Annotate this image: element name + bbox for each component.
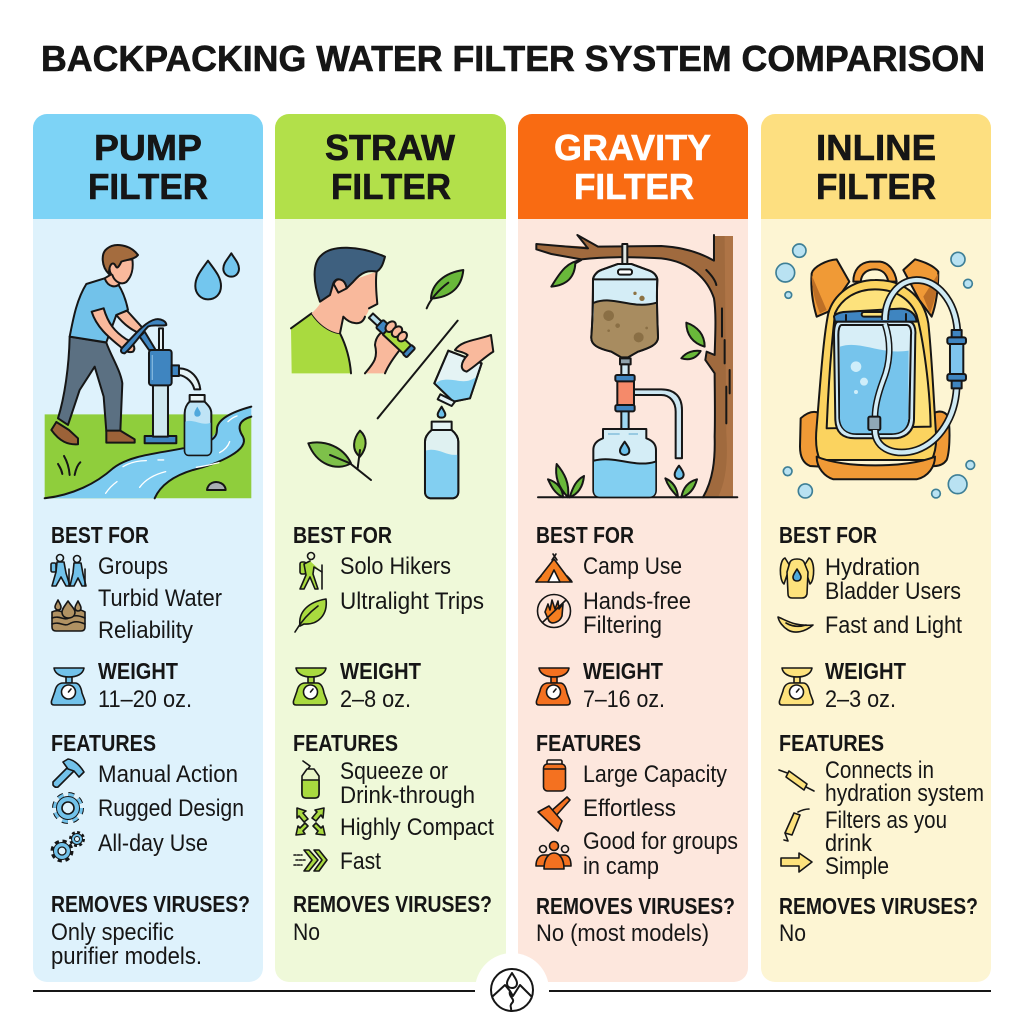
icon: tent [536,554,572,582]
icon: hammer [53,759,84,787]
text: Hands-free Filtering: Filtering [583,612,662,639]
icon: mountain and water drop logo [491,969,533,1011]
panel header [33,114,263,219]
text: Groups: Groups [98,553,168,580]
icon: water jug [544,760,566,791]
panel header: INLINE [816,127,936,168]
text: Turbid Water: Turbid Water [98,585,222,612]
removes viruses: No [293,919,320,946]
icon: arrow [781,853,812,872]
weight value [98,658,192,713]
panel: gravity filter [518,114,748,982]
icon: weight scale [536,668,570,705]
panel header: FILTER [816,166,936,207]
text: Connects in hydration system [825,757,984,807]
icon: hands-free [538,594,570,628]
weight value: 11–20 oz. [98,686,192,713]
text: Manual Action: Manual Action [98,761,238,788]
icon: gears [53,833,83,860]
text: All-day Use: All-day Use [98,830,208,857]
text: Large Capacity: Large Capacity [583,761,727,788]
text: Filters as you drink [825,807,947,857]
illustration: drinking through straw and squeeze bottle [291,248,493,498]
features heading: FEATURES [536,730,641,756]
panel header: STRAW [325,127,456,168]
removes viruses [293,891,492,946]
text: Rugged Design: Rugged Design [98,795,244,822]
text: Fast and Light: Fast and Light [825,612,962,639]
removes viruses: REMOVES VIRUSES? [293,891,492,917]
text: Hydration Bladder Users: Hydration [825,554,920,581]
text: Squeeze or Drink-through [340,758,475,809]
removes viruses: purifier models. [51,943,202,970]
icon: rake tool [538,797,570,831]
removes viruses: Only specific [51,919,174,946]
panel header [761,114,991,219]
text: Filters as you drink: Filters as you [825,807,947,834]
illustration: person using hand pump by stream [45,245,251,498]
panel: pump filter [33,114,263,982]
text: Connects in hydration system: hydration system [825,780,984,807]
text: Good for groups in camp [583,828,738,880]
panel body [33,219,263,982]
best for heading: BEST FOR [779,522,877,548]
icon: compact arrows [296,808,325,835]
removes viruses: REMOVES VIRUSES? [779,893,978,919]
panel body [761,219,991,982]
icon: bite valve tube [784,809,809,841]
icon: feather [295,599,326,632]
text: Hands-free Filtering [583,588,691,639]
features heading: FEATURES [51,730,156,756]
panel header: FILTER [88,166,208,207]
removes viruses [51,891,250,970]
text: Filters as you drink: drink [825,830,873,857]
text: Hydration Bladder Users: Bladder Users [825,578,961,605]
weight value: 2–3 oz. [825,686,896,713]
panel header: PUMP [94,127,202,168]
text: Squeeze or Drink-through: Drink-through [340,782,475,809]
weight value: WEIGHT [825,658,906,684]
icon: solo hiker [300,552,322,589]
removes viruses: REMOVES VIRUSES? [536,893,735,919]
panel header: GRAVITY [554,127,711,168]
panel header: FILTER [574,166,694,207]
icon: weight scale [779,668,813,705]
text: Highly Compact: Highly Compact [340,814,494,841]
panel: inline filter [761,114,991,982]
panel header [518,114,748,219]
panel body [275,219,506,982]
icon: inline connector [779,770,814,791]
features heading: FEATURES [293,730,398,756]
icon: squeeze bottle [302,761,319,798]
weight value: WEIGHT [583,658,663,684]
icon: turbid water [52,600,85,631]
footer divider with logo [33,953,991,1024]
text: Simple: Simple [825,853,889,880]
icon: fast chevrons [294,850,327,871]
features heading: FEATURES [779,730,884,756]
text: Good for groups in camp: in camp [583,853,659,880]
panel body [518,219,748,982]
weight value: WEIGHT [98,658,178,684]
text: Connects in hydration system: Connects in [825,757,934,784]
text: Solo Hikers: Solo Hikers [340,553,451,580]
icon: hydration pack [780,558,814,598]
illustration: backpack with hydration bladder [776,244,975,498]
icon: weight scale [293,668,327,705]
weight value: WEIGHT [340,658,421,684]
panel header: FILTER [331,166,451,207]
text: Squeeze or Drink-through: Squeeze or [340,758,448,785]
text: Hands-free Filtering: Hands-free [583,588,691,615]
icon: gear [55,795,81,821]
text: Reliability: Reliability [98,617,193,644]
icon: weight scale [51,668,85,705]
text: Effortless: Effortless [583,795,676,822]
removes viruses [779,893,978,947]
panel: straw filter [275,114,506,982]
text: Ultralight Trips: Ultralight Trips [340,588,484,615]
weight value: 2–8 oz. [340,686,411,713]
weight value [825,658,906,713]
illustration: gravity bag hanging from tree [536,235,737,497]
text: Hydration Bladder Users [825,554,961,605]
removes viruses: REMOVES VIRUSES? [51,891,250,917]
removes viruses: No [779,920,806,947]
best for heading: BEST FOR [536,522,634,548]
icon: group of people [536,842,571,869]
text: Camp Use: Camp Use [583,553,682,580]
removes viruses [536,893,735,947]
weight value [583,658,665,713]
weight value [340,658,421,713]
removes viruses: No (most models) [536,920,709,947]
weight value: 7–16 oz. [583,686,665,713]
icon: light feather [778,617,813,632]
panel header [275,114,506,219]
text: Good for groups in camp: Good for groups [583,828,738,855]
title: BACKPACKING WATER FILTER SYSTEM COMPARISON [41,38,985,79]
best for heading: BEST FOR [293,522,392,548]
best for heading: BEST FOR [51,522,149,548]
text: Fast: Fast [340,848,381,875]
icon: hikers group [51,554,86,586]
